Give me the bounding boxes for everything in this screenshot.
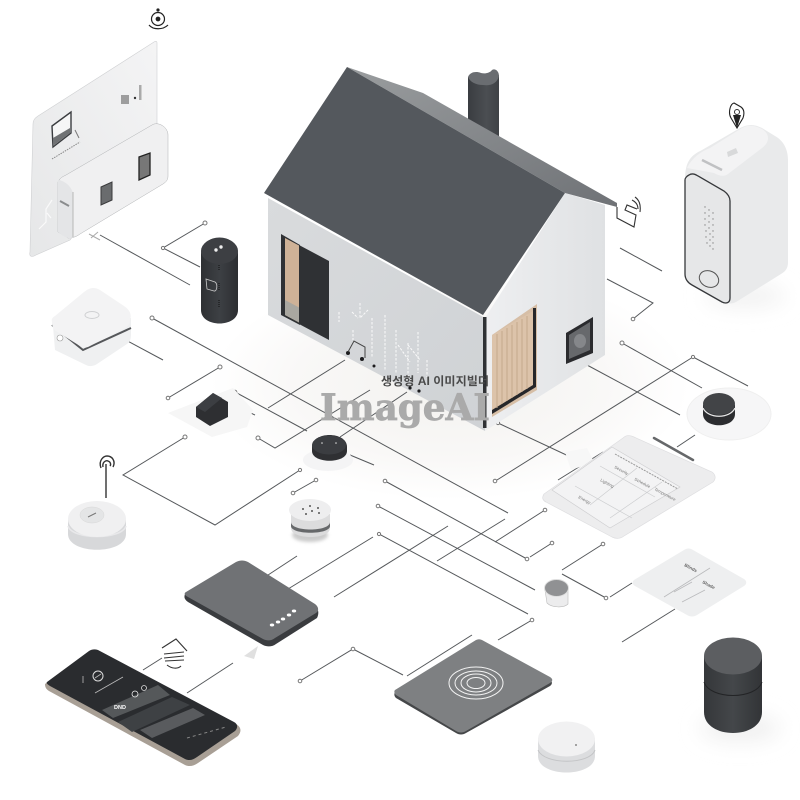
tablet on clipboard: Temperature [654,486,677,502]
smart speaker [201,238,238,324]
house [264,67,617,431]
watermark: 생성형 AI 이미지빌더 [381,374,489,388]
round white hub [68,501,126,550]
door and wood panel [281,234,329,340]
dark cylinder [700,638,780,742]
wall hub device [30,41,168,256]
tablet on clipboard [543,436,715,538]
tablet on clipboard: Security [614,464,630,476]
hub body [58,124,168,238]
tablet on clipboard: Lighting [600,477,615,489]
dark button on plate [687,388,771,440]
security panel on wall [566,317,593,364]
wall circuit marks [339,303,427,383]
stacked sensor [289,499,331,542]
white settings card [633,548,746,616]
wireless node icon [100,456,114,498]
phone notification icon [162,639,187,668]
connector lines [100,223,748,693]
router [184,560,318,646]
watermark [320,374,490,429]
wall panel screen icon [52,112,80,159]
right gable wall [485,193,605,431]
wifi signal icon [617,197,640,227]
phone screen bands [83,671,226,738]
chimney [468,69,499,143]
puck sensor on plate [303,435,353,471]
hub ports [101,182,112,205]
white plug adapter [52,288,131,366]
roof [347,67,617,207]
white dome device [538,722,595,772]
white tower device [685,125,788,308]
phone screen bands: DND [114,705,126,711]
small arrow [244,646,258,659]
small round sensor [544,580,568,607]
wall panel small marks [121,85,142,104]
connector nodes [150,221,695,683]
white settings card: Blinds [684,562,698,574]
top left icon: target [149,9,168,29]
tablet on clipboard: Schedule [634,476,652,489]
location pin icon [730,103,744,128]
ImageAI logotype: ImageAI [320,387,490,429]
white settings card: Shade [702,579,716,590]
small black cube on tray [168,388,253,437]
phone [45,649,240,766]
wood window [492,304,537,417]
left wall [268,198,485,431]
floor shadow [210,270,690,500]
tablet on clipboard: Energy [578,494,592,506]
wireless charging pad [394,639,552,734]
